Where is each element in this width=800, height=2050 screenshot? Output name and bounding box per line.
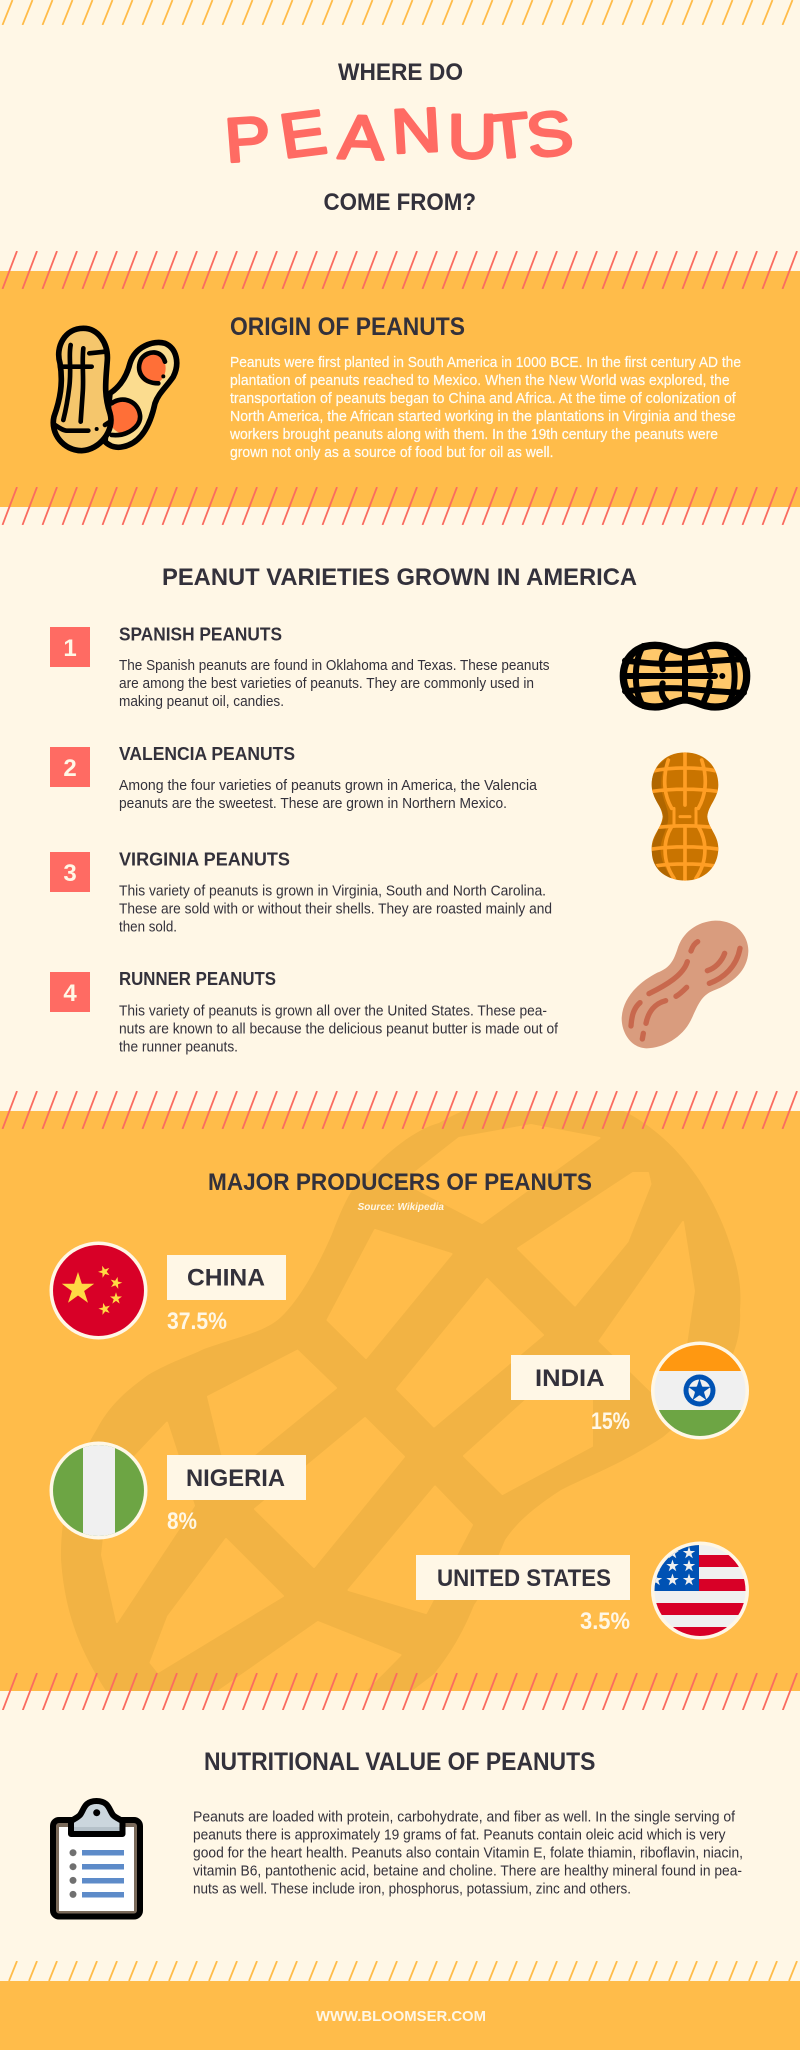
icon: united states flag: [650, 1541, 750, 1641]
variety 4: runner: RUNNER PEANUTS: [119, 968, 276, 989]
variety 3: virginia: [50, 849, 552, 936]
heading: major producers: MAJOR PRODUCERS OF PEANUTS: [208, 1169, 592, 1196]
variety 3: virginia: then sold.: [119, 920, 177, 936]
variety 1: spanish: making peanut oil, candies.: [119, 694, 284, 710]
producer: india: 15%: [591, 1408, 630, 1435]
variety 4: runner: the runner peanuts.: [119, 1040, 238, 1056]
variety 2: valencia: 2: [63, 755, 77, 782]
icon: opened and closed peanut: [53, 328, 177, 451]
icon: india flag: [650, 1340, 750, 1442]
producer: china: 37.5%: [167, 1308, 227, 1335]
text block: origin: Peanuts were first planted in South America in 1000 BCE. In the first century AD the: [230, 355, 741, 371]
variety 3: virginia: VIRGINIA PEANUTS: [119, 849, 290, 870]
footer: [0, 1981, 800, 2050]
variety 2: valencia: Among the four varieties of peanuts grown in America, the Valencia: [119, 778, 538, 794]
text block: origin: [229, 355, 741, 461]
producer: united states: [416, 1541, 750, 1641]
panel: peanut varieties: [50, 564, 748, 1056]
icon: nigeria flag: [50, 1440, 148, 1541]
variety 1: spanish: SPANISH PEANUTS: [119, 624, 282, 644]
variety 4: runner: nuts are known to all because the delicious peanut butter is made out of: [119, 1022, 559, 1038]
producer: india: [511, 1340, 750, 1442]
variety 2: valencia: [50, 743, 538, 812]
text block: origin: North America, the African started working in the plantations in Virginia and these: [230, 409, 736, 425]
source note: Source: Wikipedia: [358, 1202, 444, 1213]
producer: united states: UNITED STATES: [437, 1565, 611, 1592]
text block: origin: workers brought peanuts along with them. In the 19th century the peanuts were: [229, 427, 718, 443]
icon: china flag: [50, 1242, 148, 1340]
icon: orange peanut: [650, 752, 720, 881]
producer: nigeria: 8%: [167, 1508, 197, 1535]
variety 3: virginia: This variety of peanuts is grown in Virginia, South and North Carolina.: [119, 884, 546, 900]
producer: united states: 3.5%: [580, 1608, 630, 1635]
variety 1: spanish: 1: [63, 635, 77, 662]
variety 3: virginia: These are sold with or without their shells. They are roasted mainly and: [119, 902, 552, 918]
panel: major producers: [0, 1091, 800, 1710]
title line: come from: COME FROM?: [324, 189, 476, 216]
variety 2: valencia: VALENCIA PEANUTS: [119, 743, 295, 764]
variety 1: spanish: are among the best varieties of peanuts. They are commonly used in: [119, 676, 534, 692]
icon: tan peanut: [622, 921, 748, 1048]
producer: nigeria: [50, 1440, 306, 1541]
variety 4: runner: This variety of peanuts is grown all over the United States. These pea-: [119, 1004, 547, 1020]
producer: india: INDIA: [535, 1365, 605, 1392]
producer: china: CHINA: [187, 1264, 265, 1292]
producer: nigeria: NIGERIA: [186, 1465, 285, 1492]
text block: nutrition: [193, 1810, 743, 1898]
footer: WWW.BLOOMSER.COM: [316, 2008, 486, 2025]
heading: origin: ORIGIN OF PEANUTS: [230, 313, 465, 341]
text block: nutrition: peanuts there is approximately 19 grams of fat. Peanuts contain oleic acid which is very: [193, 1828, 726, 1844]
variety 2: valencia: peanuts are the sweetest. These are grown in Northern Mexico.: [119, 796, 507, 812]
title: [222, 59, 577, 216]
variety 1: spanish: The Spanish peanuts are found in Oklahoma and Texas. These peanuts: [119, 658, 550, 674]
variety 1: spanish: [50, 624, 550, 710]
text block: nutrition: nuts as well. These include iron, phosphorus, potassium, zinc and others.: [193, 1882, 631, 1898]
producer: china: [50, 1242, 286, 1340]
text block: origin: transportation of peanuts began to China and Africa. At the time of colonization of: [230, 391, 737, 407]
panel: origin of peanuts: [0, 251, 800, 525]
title line: where do: WHERE DO: [338, 59, 463, 86]
icon: clipboard: [53, 1801, 140, 1916]
heading: nutritional value: NUTRITIONAL VALUE OF PEANUTS: [204, 1748, 595, 1776]
heading: varieties: PEANUT VARIETIES GROWN IN AMERICA: [162, 564, 637, 591]
title word: peanuts: PEANUTS: [222, 95, 577, 175]
variety 4: runner: 4: [63, 980, 77, 1007]
variety 3: virginia: 3: [63, 860, 77, 887]
icon: black outline peanut: [623, 645, 747, 707]
text block: origin: plantation of peanuts reached to Mexico. When the New World was explored, the: [230, 373, 730, 389]
text block: nutrition: Peanuts are loaded with protein, carbohydrate, and fiber as well. In the single serving of: [193, 1810, 736, 1826]
variety 4: runner: [50, 968, 559, 1056]
panel: nutritional value: [53, 1748, 743, 1916]
text block: nutrition: good for the heart health. Peanuts also contain Vitamin E, folate thiamin, riboflavin, niacin,: [193, 1846, 743, 1862]
text block: nutrition: vitamin B6, pantothenic acid, betaine and choline. There are healthy mineral found in pea-: [193, 1864, 742, 1880]
text block: origin: grown not only as a source of food but for oil as well.: [230, 445, 554, 461]
watermark: large peanut: [61, 1095, 740, 1700]
